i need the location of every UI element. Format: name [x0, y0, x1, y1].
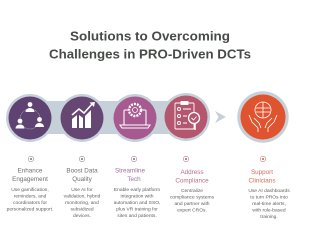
column: enhance engagement: Engagement: [12, 176, 48, 183]
icon: enhance engagement circle: [6, 94, 54, 142]
column: boost data quality: [64, 156, 101, 219]
column: support clinicians: Use AI dashboards: [248, 188, 290, 194]
column: boost data quality: monitoring, and: [65, 200, 99, 206]
column: support clinicians: with role-based: [252, 208, 286, 214]
column: streamline tech: [114, 156, 160, 219]
column: enhance engagement: Use gamification,: [11, 187, 49, 193]
connector band: [30, 101, 186, 134]
arrow: [215, 111, 226, 123]
column: enhance engagement: reminders, and: [14, 194, 47, 200]
column: support clinicians: Support: [251, 169, 273, 176]
column: address compliance: compliance systems: [170, 194, 215, 200]
icon: address compliance circle: [162, 93, 210, 141]
column: streamline tech: Enable early platform: [114, 187, 160, 193]
column: streamline tech: Streamline: [115, 168, 146, 174]
icon: support clinicians circle: [237, 91, 289, 143]
column: boost data quality: Boost Data: [66, 168, 98, 174]
column: enhance engagement: coordinators for: [13, 200, 47, 206]
icon: streamline tech circle: [111, 94, 159, 142]
column: boost data quality: Quality: [72, 176, 93, 183]
column: boost data quality: validation, hybrid: [64, 194, 101, 200]
column: support clinicians: [248, 156, 290, 220]
column: support clinicians: to turn PROs into: [250, 194, 288, 200]
column: address compliance: Compliance: [175, 178, 209, 184]
column: address compliance: Centralize: [181, 188, 203, 194]
column: support clinicians: Clinicians: [249, 178, 275, 184]
column: enhance engagement: Enhance: [18, 168, 43, 174]
title: [49, 30, 251, 62]
column: boost data quality: Use AI for: [71, 187, 93, 193]
column: enhance engagement: personalized support.: [7, 206, 53, 212]
column: enhance engagement: [7, 156, 53, 212]
column: streamline tech: plus VR training for: [116, 206, 158, 212]
icon: boost data quality circle: [58, 94, 106, 142]
column: address compliance: [170, 156, 215, 214]
column: streamline tech: integration with: [121, 194, 154, 200]
column: support clinicians: training.: [260, 214, 278, 220]
column: support clinicians: real-time alerts,: [252, 201, 286, 207]
column: boost data quality: devices.: [73, 213, 91, 219]
column: streamline tech: automation and SSO,: [114, 200, 160, 206]
title: Challenges in PRO-Driven DCTs: [49, 48, 251, 62]
column: streamline tech: sites and patients.: [117, 213, 157, 219]
column: streamline tech: Tech: [127, 176, 141, 183]
column: address compliance: expert CROs.: [177, 208, 207, 214]
column: address compliance: Address: [180, 169, 204, 176]
title: Solutions to Overcoming: [70, 30, 230, 44]
column: address compliance: and partner with: [174, 201, 210, 207]
column: boost data quality: subsidized: [70, 206, 94, 212]
